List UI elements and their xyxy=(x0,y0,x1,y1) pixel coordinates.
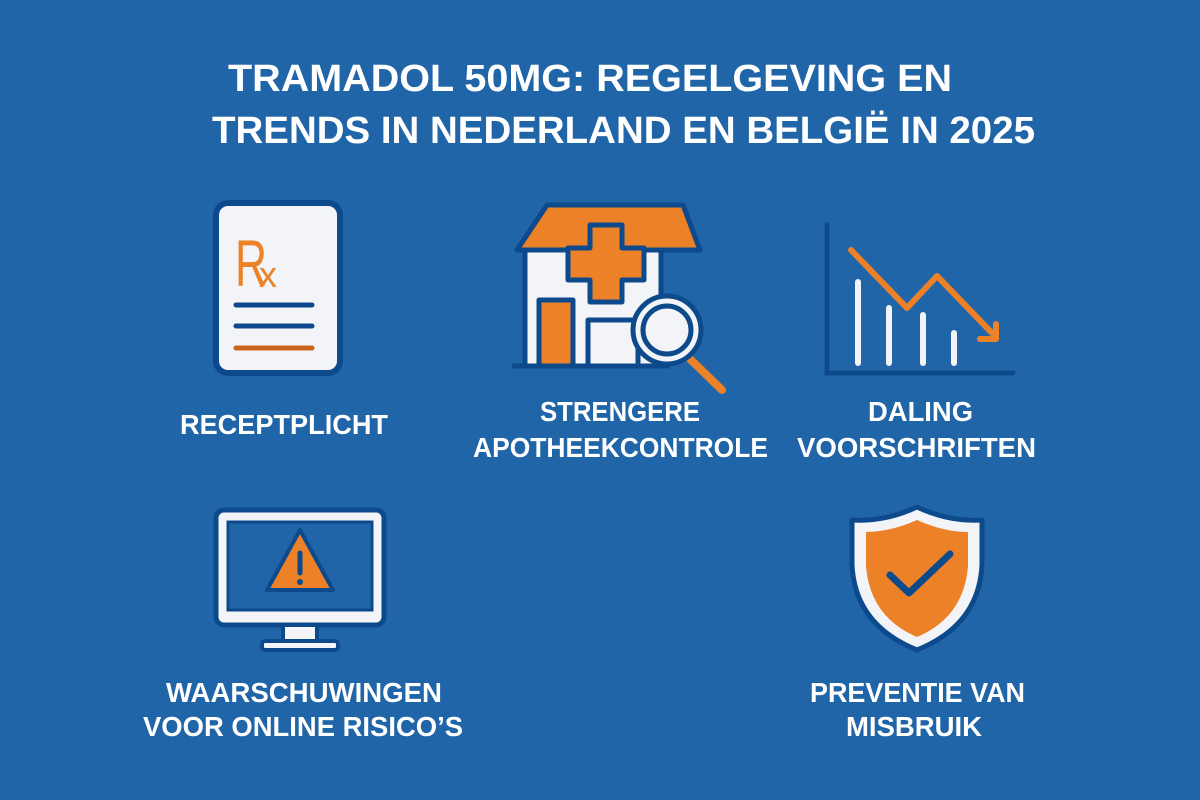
icon: shield check xyxy=(852,507,982,650)
icon: monitor warning xyxy=(216,510,384,650)
label: strengere apotheekcontrole: STRENGERE xyxy=(540,396,700,427)
label: waarschuwingen: VOOR ONLINE RISICO’S xyxy=(143,711,463,742)
label: daling voorschriften xyxy=(797,396,1036,463)
label: strengere apotheekcontrole xyxy=(473,396,768,463)
label: preventie van misbruik: MISBRUIK xyxy=(846,711,982,742)
label: receptplicht: RECEPTPLICHT xyxy=(180,409,388,440)
label: daling voorschriften: DALING xyxy=(868,396,973,427)
title xyxy=(212,58,1035,152)
label: daling voorschriften: VOORSCHRIFTEN xyxy=(797,432,1036,463)
label: waarschuwingen xyxy=(143,677,463,742)
icon: prescription document: x xyxy=(259,254,277,295)
icon: pharmacy with magnifier xyxy=(512,205,722,390)
label: strengere apotheekcontrole: APOTHEEKCONTROLE xyxy=(473,432,768,463)
title: TRAMADOL 50MG: REGELGEVING EN xyxy=(228,58,952,100)
icon: declining chart xyxy=(827,225,1013,373)
label: waarschuwingen: WAARSCHUWINGEN xyxy=(166,677,442,708)
icon: prescription document: R xyxy=(235,226,267,300)
icon: prescription document xyxy=(216,203,340,373)
label: preventie van misbruik xyxy=(810,677,1025,742)
label: preventie van misbruik: PREVENTIE VAN xyxy=(810,677,1025,708)
title: TRENDS IN NEDERLAND EN BELGIË IN 2025 xyxy=(212,109,1035,152)
